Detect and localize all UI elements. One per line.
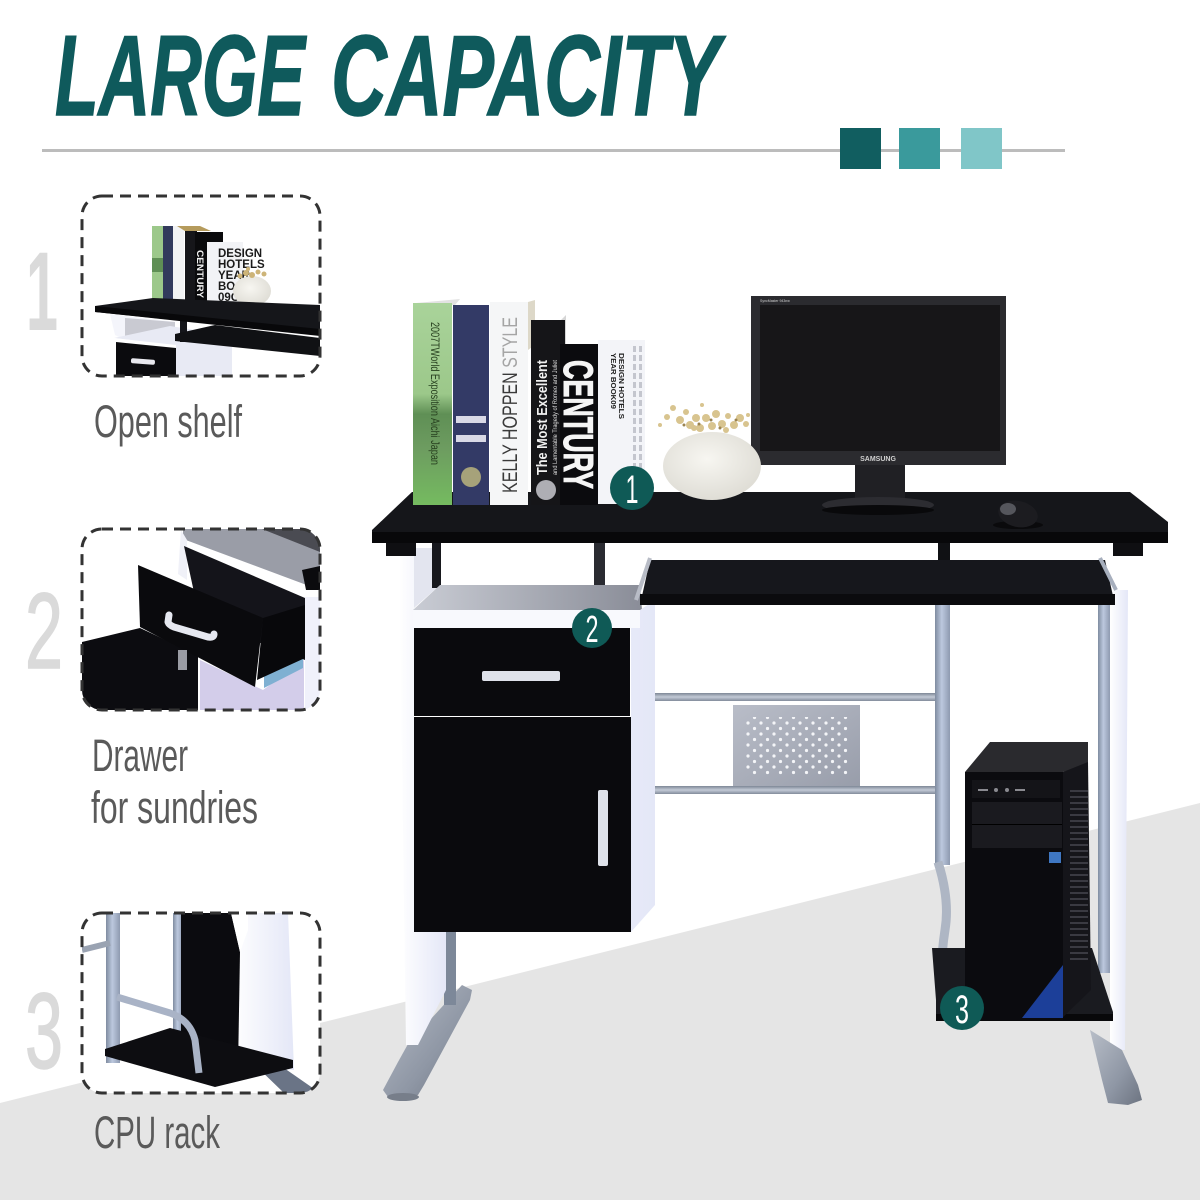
- metal rods and perforated plate: [655, 693, 935, 794]
- callout marker 1: 1: [626, 468, 638, 512]
- number 2: 2: [25, 570, 63, 691]
- label: CPU rack: CPU rack: [94, 1107, 220, 1158]
- inset dashed frame: [82, 913, 320, 1093]
- right white leg panel: [1110, 590, 1128, 1050]
- desktop top: [372, 492, 1168, 556]
- open shelf surface: [413, 585, 642, 610]
- inset photo: CPU rack: [82, 913, 320, 1093]
- inset photo: open shelf: HOTELS: [218, 259, 265, 271]
- callout marker 2: [572, 608, 612, 651]
- desk left leg: [383, 545, 472, 1101]
- monitor: SyncMaster 943nw: [760, 299, 790, 303]
- desk product illustration: [372, 296, 1168, 1105]
- monitor: SAMSUNG: [860, 456, 896, 463]
- green book: [413, 299, 460, 505]
- cabinet door: [414, 717, 631, 932]
- callout marker 3: [940, 986, 984, 1032]
- label: open shelf: Open shelf: [94, 396, 242, 447]
- right foot: [1090, 1030, 1142, 1105]
- black book: The Most Excellent: The Most Excellent: [535, 360, 551, 475]
- door handle: [598, 790, 608, 866]
- feature 3: CPU rack: [25, 913, 320, 1158]
- number 3: 3: [25, 970, 63, 1091]
- inset photo: open shelf: 09O: [218, 292, 240, 304]
- inset dashed frame: [82, 196, 320, 376]
- black book: The Most Excellent: [531, 315, 566, 505]
- header rule: [42, 149, 1065, 152]
- drawer front: [414, 628, 630, 716]
- CPU rack shelf: [932, 948, 1113, 1021]
- callout marker 3: 3: [955, 988, 969, 1032]
- inset photo: drawer: [82, 529, 320, 710]
- white book: Kelly Hoppen: [490, 300, 535, 505]
- inset photo: open shelf: YEAR: [218, 270, 251, 282]
- inset photo: open shelf: [95, 226, 320, 376]
- white book: Design Hotels: YEAR BOOK09: [609, 353, 618, 409]
- callout marker 2: 2: [586, 609, 598, 651]
- inset photo: open shelf: CENTURY: [195, 250, 205, 298]
- centre metal post: [935, 603, 950, 865]
- colour swatches: [840, 128, 1002, 169]
- books: [413, 299, 645, 505]
- feature 1: open shelf: [26, 196, 320, 447]
- navy book: [453, 305, 489, 505]
- white book: Kelly Hoppen: KELLY HOPPEN STYLE: [499, 317, 522, 493]
- black book: The Most Excellent: and Lamentable Tragedy of Romeo and Juliet: [552, 360, 559, 475]
- cabinet side panel: [413, 600, 655, 932]
- curved rack support: [938, 862, 946, 1000]
- callout marker 1: [610, 466, 654, 512]
- vase with dried flowers: [658, 403, 761, 500]
- title: [55, 13, 726, 140]
- title: LARGE: [55, 13, 307, 140]
- background: grey diagonal floor: [0, 803, 1200, 1200]
- black book: Century: CENTURY: [555, 360, 602, 489]
- inset dashed frame: [82, 529, 320, 710]
- keyboard tray: [636, 558, 1116, 605]
- white book: Design Hotels: [598, 340, 645, 504]
- label: drawer for sundries: [91, 730, 258, 833]
- white book: Design Hotels: DESIGN HOTELS: [617, 353, 626, 419]
- title: CAPACITY: [331, 13, 726, 140]
- number 1: 1: [26, 229, 58, 354]
- cabinet white front band: [413, 610, 640, 628]
- black book: Century: [555, 344, 602, 505]
- label: drawer for sundries: Drawer: [92, 730, 188, 781]
- monitor: [751, 296, 1006, 515]
- right metal post: [1098, 603, 1110, 973]
- computer mouse: [993, 497, 1043, 531]
- computer tower: [965, 742, 1091, 1020]
- inset photo: open shelf: DESIGN: [218, 248, 262, 260]
- label: drawer for sundries: for sundries: [91, 782, 258, 833]
- green book: 2007TWorld Exposition Aichi Japan: [428, 322, 442, 465]
- feature 2: drawer: [25, 529, 320, 833]
- inset photo: open shelf: BOOK: [218, 281, 253, 293]
- support posts under desktop: [432, 543, 950, 588]
- drawer handle: [482, 671, 560, 681]
